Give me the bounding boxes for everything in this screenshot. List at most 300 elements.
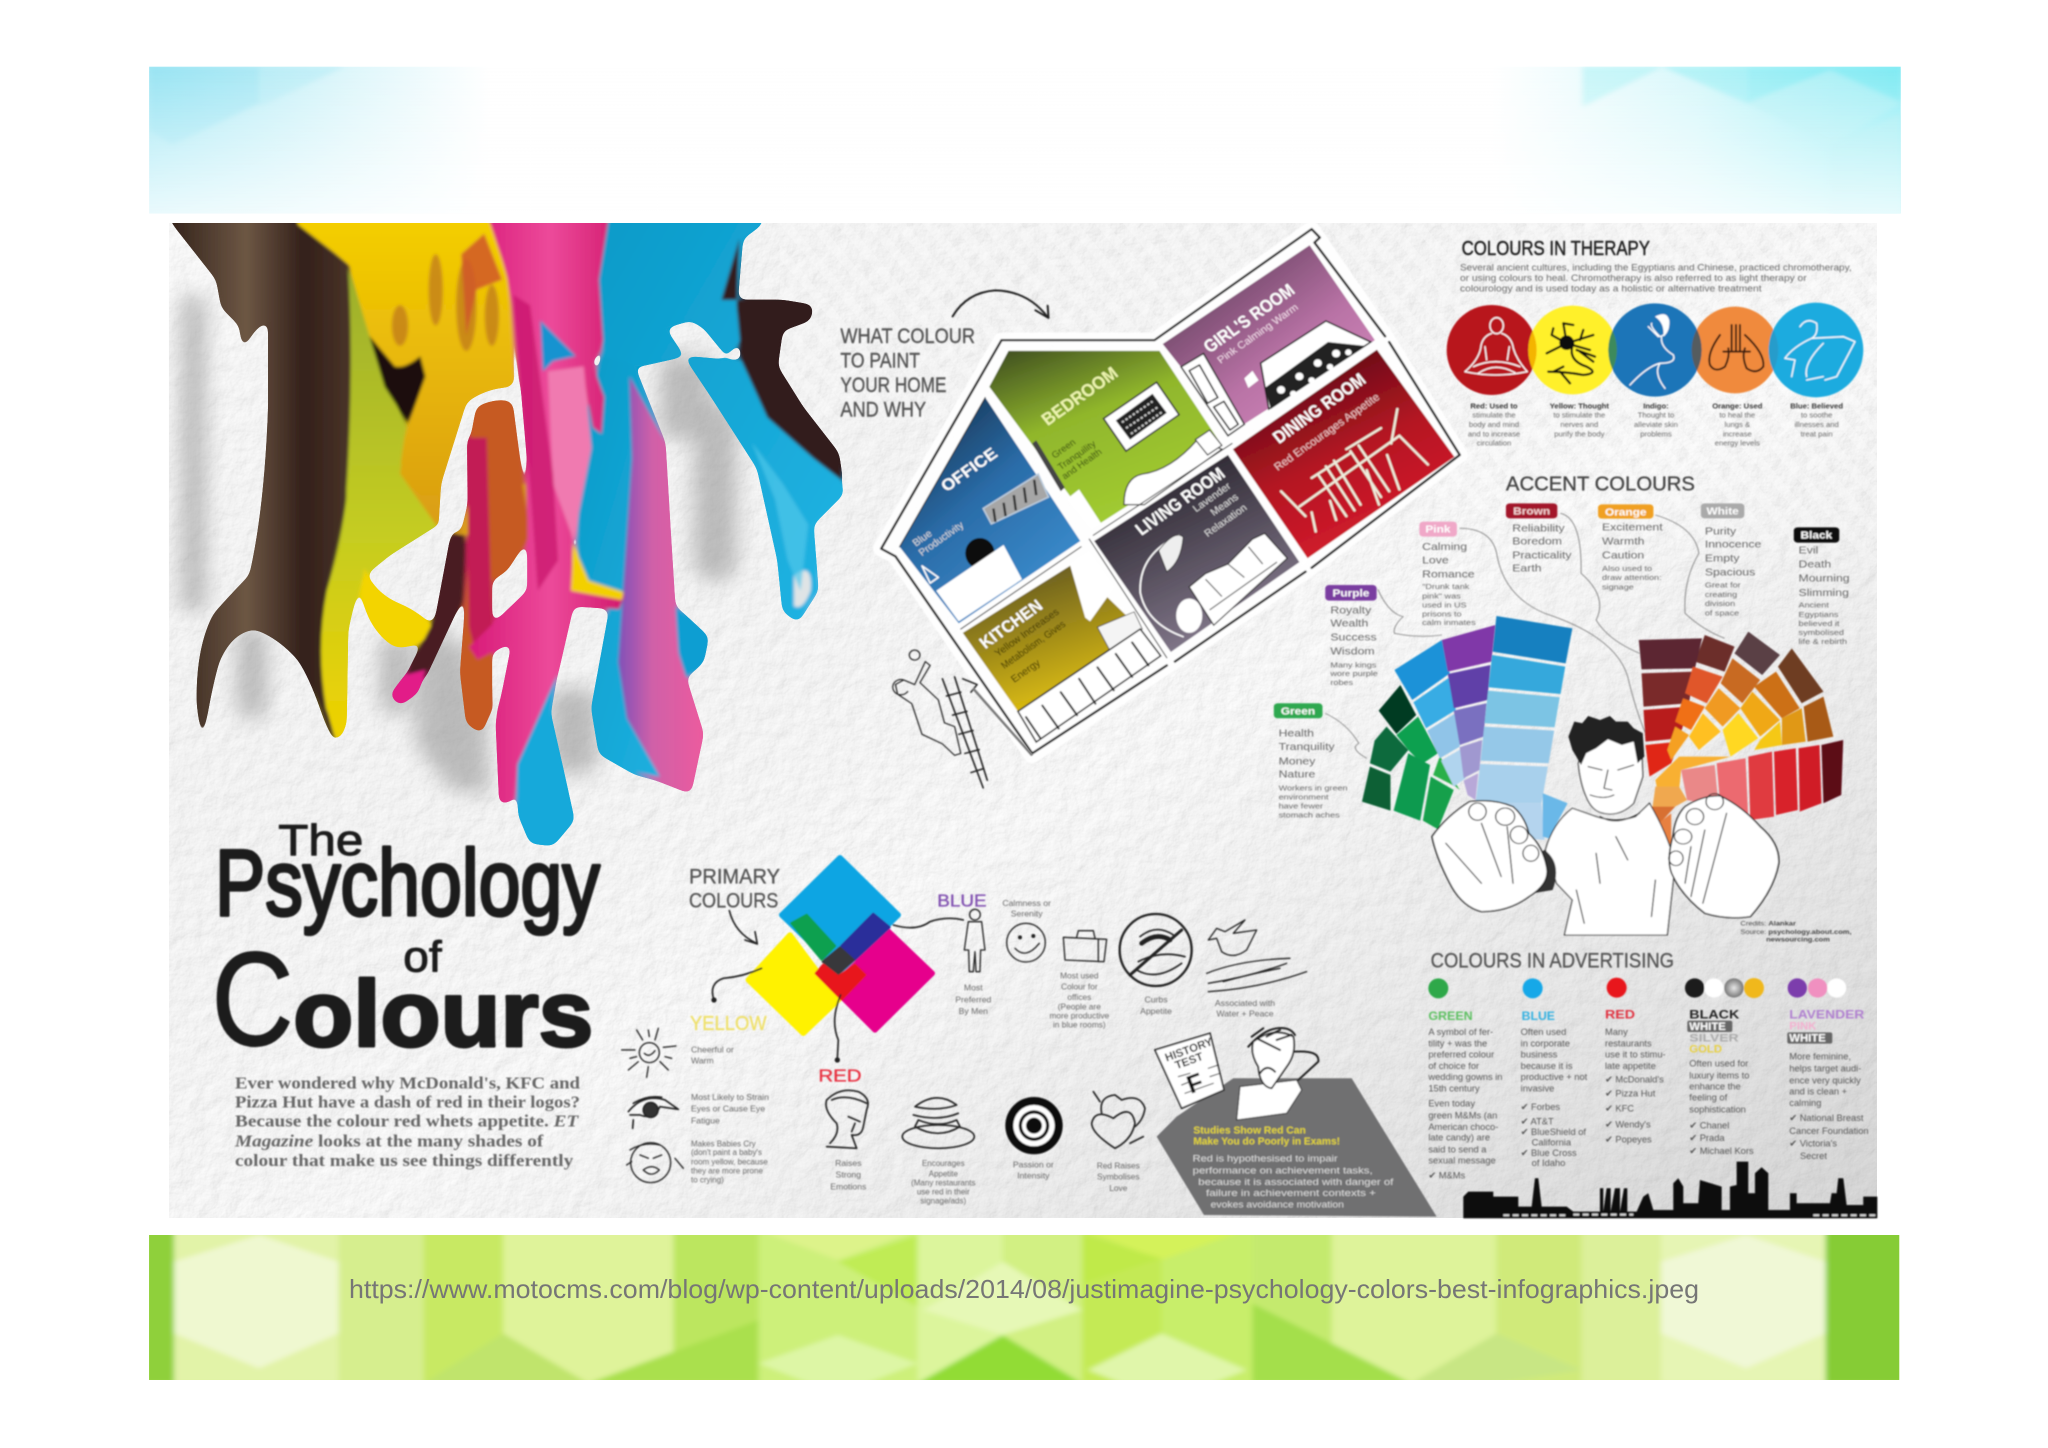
accent lists: Purity bbox=[1705, 526, 1736, 537]
column: lavender pink white: More feminine, bbox=[1789, 1051, 1851, 1061]
heading: what colour to paint your home and why: TO PAINT bbox=[840, 348, 920, 373]
room: living room: Relaxation bbox=[1203, 503, 1250, 540]
heading: COLOURS IN ADVERTISING bbox=[1431, 948, 1674, 972]
accent lists: of space bbox=[1705, 608, 1740, 617]
column: red: ✔ McDonald's bbox=[1605, 1075, 1664, 1085]
callout heading: Studies Show Red Can bbox=[1193, 1125, 1306, 1136]
column: green: Even today bbox=[1428, 1099, 1475, 1109]
column: blue: ✔ AT&T bbox=[1521, 1116, 1554, 1126]
accent lists: Warmth bbox=[1602, 536, 1644, 547]
accent lists: Slimming bbox=[1799, 588, 1849, 599]
column: black white silver gold: SILVER bbox=[1689, 1033, 1739, 1045]
icon: no burger bbox=[1120, 914, 1192, 986]
pink purple streak bbox=[618, 377, 704, 794]
column: blue: ✔ Forbes bbox=[1521, 1102, 1560, 1112]
accent lists: Royalty bbox=[1330, 605, 1372, 616]
panel: colours in therapy: purify the body bbox=[1554, 429, 1605, 438]
accent lists: Also used to bbox=[1602, 564, 1652, 573]
icon: dove and waves bbox=[1207, 920, 1307, 992]
caption: offices: Colour for bbox=[1061, 981, 1098, 991]
column: blue: in corporate bbox=[1521, 1039, 1570, 1049]
cyan central body bbox=[579, 351, 704, 790]
heading: what colour to paint your home and why bbox=[840, 324, 975, 421]
column: green: wedding gowns in bbox=[1427, 1072, 1502, 1082]
label: red: RED bbox=[818, 1066, 862, 1086]
accent lists: robes bbox=[1330, 678, 1353, 687]
accent lists: wore purple bbox=[1329, 669, 1378, 678]
caption: cheerful or warm: Cheerful or bbox=[691, 1045, 734, 1055]
column: green: preferred colour bbox=[1428, 1050, 1494, 1060]
caption: raises strong emotions: Strong bbox=[836, 1169, 861, 1179]
panel: colours in therapy: lungs & bbox=[1725, 420, 1750, 429]
column: lavender pink white: LAVENDER bbox=[1789, 1007, 1865, 1021]
heading: what colour to paint your home and why: WHAT COLOUR bbox=[840, 324, 975, 348]
icon: neuron body bbox=[1559, 335, 1574, 350]
accent lists: Earth bbox=[1512, 563, 1542, 574]
caption: strain eyes: Fatigue bbox=[691, 1115, 720, 1125]
column: green: of choice for bbox=[1428, 1061, 1479, 1071]
accent lists: Wisdom bbox=[1330, 646, 1375, 657]
room: living room: Lavender bbox=[1191, 481, 1234, 515]
column: black white silver gold: ✔ Michael Kors bbox=[1689, 1146, 1754, 1156]
caption: offices: (People are bbox=[1058, 1001, 1101, 1011]
column: red: restaurants bbox=[1605, 1039, 1652, 1049]
right swatch fan bbox=[1639, 632, 1843, 850]
accent lists: signage bbox=[1602, 582, 1634, 591]
bottom banner: green faceted band bbox=[140, 1230, 1916, 1383]
credits: Source: psychology.about.com, bbox=[1740, 929, 1852, 936]
caption: raises strong emotions: Raises bbox=[835, 1158, 862, 1168]
connector dot: red bbox=[835, 1057, 840, 1063]
caption: most preferred by men: By Men bbox=[959, 1006, 988, 1016]
room: kitchen: Yellow Increases bbox=[993, 607, 1062, 659]
arrow: heading to house bbox=[953, 290, 1048, 318]
caption: water and peace: Water + Peace bbox=[1216, 1009, 1274, 1019]
caption: calmness: Calmness or bbox=[1002, 898, 1051, 908]
caption: curbs appetite: Curbs bbox=[1144, 995, 1168, 1005]
panel: blue and red icons and exam callout bbox=[1002, 898, 1437, 1217]
room: office: Blue bbox=[911, 528, 935, 549]
cyan lower drip bbox=[517, 611, 574, 846]
caption: strain eyes: Eyes or Cause Eye bbox=[691, 1104, 765, 1114]
caption: red raises: Love bbox=[1109, 1183, 1128, 1193]
cyan patch in pink bbox=[540, 320, 576, 371]
accent lists: Ancient bbox=[1799, 600, 1830, 609]
panel: colours in therapy: Indigo: bbox=[1643, 401, 1669, 410]
column: lavender pink white: PINK bbox=[1789, 1020, 1817, 1032]
gold folds bbox=[392, 254, 499, 351]
column: black white silver gold: BLACK bbox=[1689, 1007, 1740, 1021]
woman hair bbox=[1655, 315, 1669, 337]
column: blue: BLUE bbox=[1522, 1009, 1555, 1023]
column: black white silver gold: WHITE bbox=[1689, 1021, 1726, 1033]
column: blue: California bbox=[1532, 1138, 1572, 1148]
chip labels: Black bbox=[1800, 530, 1833, 541]
label: blue: BLUE bbox=[937, 891, 987, 911]
callout body: evokes avoidance motivation bbox=[1211, 1199, 1344, 1209]
accent lists: Health bbox=[1279, 728, 1314, 739]
colour dots bbox=[1428, 978, 1846, 998]
column: red: RED bbox=[1605, 1007, 1635, 1021]
title: the psychology of colours: of bbox=[403, 934, 443, 982]
caption: water and peace: Associated with bbox=[1215, 998, 1275, 1008]
column: blue: of Idaho bbox=[1532, 1158, 1565, 1168]
caption: babies cry: (don't paint a baby's bbox=[691, 1148, 762, 1157]
t-shirt bbox=[1545, 803, 1675, 935]
history test paper bbox=[1155, 1033, 1224, 1108]
accent lists: calm inmates bbox=[1422, 618, 1476, 627]
accent lists: Reliability bbox=[1512, 523, 1565, 534]
column: green: late candy) are bbox=[1428, 1133, 1490, 1143]
accent lists: Nature bbox=[1279, 769, 1315, 780]
column: blue: business bbox=[1521, 1050, 1558, 1060]
icon: smiley bbox=[1007, 923, 1045, 962]
icon: sun bbox=[622, 1028, 676, 1077]
captions: circulation bbox=[1477, 439, 1511, 448]
column: green: tility + was the bbox=[1428, 1039, 1487, 1049]
caption: babies cry: room yellow, because bbox=[691, 1157, 768, 1166]
room: kitchen: KITCHEN bbox=[975, 596, 1046, 652]
accent lists: draw attention: bbox=[1602, 573, 1662, 582]
room: bedroom: and Health bbox=[1060, 447, 1104, 482]
accent lists: used in US bbox=[1422, 600, 1467, 609]
intro paragraph bbox=[234, 1073, 580, 1170]
column: blue: because it is bbox=[1521, 1061, 1573, 1071]
overlapping colour diamonds bbox=[748, 858, 932, 1033]
column: green: 15th century bbox=[1428, 1084, 1480, 1094]
source url caption: https://www.motocms.com/blog/wp-content/uploads/2014/08/justimagine-psychology-colors-best-infographics.jpeg bbox=[349, 1274, 1699, 1304]
caption: red raises: Red Raises bbox=[1097, 1160, 1140, 1170]
accent lists: Love bbox=[1422, 555, 1449, 566]
column: black white silver gold bbox=[1687, 1007, 1754, 1156]
panel: primary colours bbox=[622, 858, 992, 1205]
panel: colours in therapy: Yellow: Thought bbox=[1550, 401, 1609, 410]
title: the psychology of colours: Psychology bbox=[215, 831, 600, 935]
caption: raises strong emotions: Emotions bbox=[830, 1181, 867, 1191]
accent lists: Egyptians bbox=[1799, 610, 1838, 619]
icon: painter on ladder bbox=[893, 650, 1032, 788]
arrow: heading to diamond bbox=[729, 911, 757, 944]
connector lines bbox=[1325, 513, 1725, 758]
icon: neuron bbox=[1547, 323, 1595, 383]
face bbox=[1588, 765, 1640, 821]
column: green bbox=[1427, 1009, 1502, 1180]
column: blue: productive + not bbox=[1521, 1072, 1588, 1082]
accent lists: Spacious bbox=[1705, 567, 1756, 578]
column: blue: ✔ Blue Cross bbox=[1521, 1148, 1577, 1158]
room: office bbox=[900, 398, 1080, 623]
panel: colours in therapy: alleviate skin bbox=[1634, 420, 1678, 429]
room: office: Productivity bbox=[917, 520, 967, 559]
icon: target bbox=[1005, 1097, 1063, 1154]
title: the psychology of colours: The bbox=[278, 817, 363, 865]
intro paragraph: colour that make us see things differently bbox=[235, 1151, 574, 1170]
skyline bbox=[1463, 1162, 1877, 1218]
left swatch fan bbox=[1362, 616, 1572, 840]
caption: curbs appetite: Appetite bbox=[1140, 1006, 1172, 1016]
caption: most preferred by men: Most bbox=[964, 983, 983, 993]
accent lists: pink" was bbox=[1422, 591, 1461, 600]
column: red: ✔ KFC bbox=[1605, 1104, 1634, 1114]
column: lavender pink white: ✔ National Breast bbox=[1789, 1113, 1864, 1123]
panel: colours in therapy: nerves and bbox=[1560, 420, 1598, 429]
accent lists: Excitement bbox=[1602, 522, 1664, 533]
room: kitchen: Energy bbox=[1009, 657, 1044, 685]
intro text: colourology and is used today as a holistic or alternative treatment bbox=[1460, 283, 1762, 293]
accent lists: have fewer bbox=[1279, 801, 1323, 810]
paint drips illustration bbox=[160, 198, 844, 846]
room divider lines bbox=[900, 398, 1232, 658]
therapy circles bbox=[1447, 303, 1863, 397]
caption: encourages appetite: use red in their bbox=[917, 1187, 970, 1196]
caption: offices: more productive bbox=[1049, 1010, 1110, 1020]
accent lists: creating bbox=[1705, 590, 1738, 599]
room: dining room bbox=[1233, 350, 1454, 558]
left hand bbox=[1432, 801, 1547, 912]
accent lists bbox=[1279, 522, 1850, 819]
callout body: because it is associated with danger of bbox=[1198, 1177, 1394, 1187]
column: blue: Often used bbox=[1521, 1027, 1566, 1037]
room: bedroom: BEDROOM bbox=[1038, 363, 1122, 429]
column: green: sexual message bbox=[1428, 1155, 1496, 1165]
accent lists: Romance bbox=[1422, 569, 1475, 580]
room: kitchen: Metabolism, Gives bbox=[999, 619, 1068, 672]
column: black white silver gold: ✔ Prada bbox=[1689, 1133, 1725, 1143]
icon: meditating figure bbox=[1465, 318, 1527, 375]
panel: primary colours: COLOURS bbox=[689, 889, 778, 913]
room: living room bbox=[1094, 455, 1299, 652]
dark brown right paint bbox=[721, 239, 843, 481]
cyan upper paint bbox=[599, 198, 844, 622]
connector: yellow bbox=[712, 968, 762, 1000]
chip labels bbox=[1274, 503, 1839, 718]
accent lists: Calming bbox=[1422, 542, 1467, 553]
caption: babies cry: Makes Babies Cry bbox=[691, 1140, 756, 1149]
room: bedroom: Tranquility bbox=[1056, 439, 1099, 473]
icon: eye bbox=[628, 1097, 678, 1128]
column: black white silver gold: Often used for bbox=[1689, 1059, 1748, 1069]
room: living room: LIVING ROOM bbox=[1132, 464, 1229, 539]
icon: hearts bbox=[1092, 1092, 1145, 1148]
connector dot: yellow bbox=[711, 997, 717, 1003]
panel: colours in therapy: to stimulate the bbox=[1553, 411, 1605, 420]
panel: colours in therapy: Blue: Believed bbox=[1790, 401, 1843, 410]
column: red: ✔ Pizza Hut bbox=[1605, 1089, 1656, 1099]
chip labels: Orange bbox=[1605, 507, 1647, 518]
chip labels: Green bbox=[1281, 706, 1315, 717]
column: red: ✔ Popeyes bbox=[1605, 1134, 1652, 1144]
column: lavender pink white: WHITE bbox=[1789, 1033, 1826, 1045]
house outline bbox=[881, 229, 1460, 753]
panel: colours in therapy: illnesses and bbox=[1794, 420, 1839, 429]
accent lists: Boredom bbox=[1512, 536, 1562, 547]
chip labels: Brown bbox=[1513, 506, 1550, 517]
column: black white silver gold: luxury items to bbox=[1689, 1070, 1749, 1080]
heading: ACCENT COLOURS bbox=[1506, 472, 1695, 495]
caption: encourages appetite: signage/ads) bbox=[920, 1196, 966, 1205]
column: black white silver gold: feeling of bbox=[1689, 1093, 1728, 1103]
captions: body and mind bbox=[1469, 420, 1519, 429]
accent lists: believed it bbox=[1799, 619, 1840, 628]
accent lists: Mourning bbox=[1799, 573, 1850, 584]
column: lavender pink white bbox=[1787, 1007, 1869, 1161]
accent lists: Caution bbox=[1602, 550, 1644, 561]
column: red: late appetite bbox=[1605, 1061, 1656, 1071]
panel: colours in therapy: increase bbox=[1723, 429, 1752, 438]
brown paint body bbox=[172, 223, 358, 738]
icon: man bbox=[964, 909, 985, 972]
column: lavender pink white: calming bbox=[1789, 1098, 1821, 1108]
panel: colours in advertising bbox=[1427, 948, 1877, 1218]
accent lists: Innocence bbox=[1705, 539, 1761, 550]
icon: crying baby bbox=[627, 1143, 683, 1183]
panel: infographic paper background bbox=[169, 223, 1877, 1218]
head bbox=[1578, 733, 1643, 814]
history test paper: F bbox=[1183, 1068, 1207, 1100]
column: green: green M&Ms (an bbox=[1428, 1110, 1497, 1120]
chip labels: Purple bbox=[1332, 588, 1369, 599]
heading: PRIMARY bbox=[689, 864, 780, 888]
accent lists: Tranquility bbox=[1279, 742, 1335, 753]
heading: what colour to paint your home and why: AND WHY bbox=[840, 397, 926, 421]
history test paper: HISTORY bbox=[1164, 1036, 1215, 1064]
column: black white silver gold: ✔ Chanel bbox=[1689, 1120, 1729, 1130]
caption: passion: Intensity bbox=[1017, 1170, 1050, 1180]
callout heading: Make You do Poorly in Exams! bbox=[1193, 1136, 1340, 1147]
panel: accent colours bbox=[1274, 472, 1852, 943]
accent lists: Great for bbox=[1705, 580, 1741, 589]
accent lists: Empty bbox=[1705, 553, 1740, 564]
panel: colours in therapy: to soothe bbox=[1801, 411, 1832, 420]
room: bedroom bbox=[989, 351, 1222, 530]
caption: encourages appetite: Appetite bbox=[929, 1170, 959, 1179]
caption: encourages appetite: Encourages bbox=[922, 1159, 965, 1168]
top banner: cyan faceted band bbox=[149, 67, 1901, 213]
accent lists: Money bbox=[1279, 756, 1316, 767]
panel: colours in therapy: Orange: Used bbox=[1712, 401, 1763, 410]
column: green: American choco- bbox=[1428, 1122, 1498, 1132]
panel: colours in therapy: energy levels bbox=[1715, 439, 1760, 448]
accent lists: life & rebirth bbox=[1799, 637, 1847, 646]
fingers and nails bbox=[1446, 794, 1727, 923]
column: black white silver gold: sophistication bbox=[1689, 1105, 1746, 1115]
caption: strain eyes: Most Likely to Strain bbox=[691, 1092, 769, 1102]
hair bbox=[1568, 716, 1644, 765]
captions: stimulate the bbox=[1472, 411, 1516, 420]
column: lavender pink white: and is clean + bbox=[1789, 1086, 1847, 1096]
intro paragraph: Pizza Hut have a dash of red in their logos? bbox=[235, 1093, 580, 1112]
column: lavender pink white: ence very quickly bbox=[1789, 1075, 1861, 1085]
orange-red folds bbox=[461, 234, 502, 336]
column: green: A symbol of fer- bbox=[1428, 1027, 1493, 1037]
caption: most preferred by men: Preferred bbox=[955, 995, 992, 1005]
accent lists: "Drunk tank bbox=[1422, 582, 1470, 591]
column: black white silver gold: enhance the bbox=[1689, 1081, 1741, 1091]
accent lists: stomach aches bbox=[1279, 810, 1340, 819]
magenta main fold bbox=[469, 198, 632, 805]
icon: angry head bbox=[826, 1090, 868, 1148]
callout body: Red is hypothesised to impair bbox=[1193, 1154, 1338, 1164]
column: lavender pink white: ✔ Victoria's bbox=[1789, 1139, 1837, 1149]
room: girl's room: GIRL'S ROOM bbox=[1200, 280, 1298, 357]
panel: colours in therapy: to heal the bbox=[1719, 411, 1755, 420]
captions: and to increase bbox=[1468, 429, 1520, 438]
caption: calmness: Serenity bbox=[1011, 909, 1043, 919]
wristband bbox=[1533, 850, 1556, 893]
accent lists: Success bbox=[1330, 632, 1377, 643]
accent lists: Workers in green bbox=[1279, 783, 1348, 792]
icon: burger on plate bbox=[902, 1098, 974, 1148]
icon: briefcase bbox=[1063, 931, 1107, 962]
accent lists: symbolised bbox=[1799, 628, 1844, 637]
column: red: Many bbox=[1605, 1027, 1628, 1037]
yellow-green paint bbox=[321, 267, 438, 743]
room: girl's room bbox=[1163, 245, 1375, 436]
accent lists: environment bbox=[1279, 792, 1329, 801]
title: the psychology of colours bbox=[212, 817, 600, 1074]
panel: colours in therapy: problems bbox=[1640, 429, 1672, 438]
title: the psychology of colours: C bbox=[212, 925, 293, 1074]
panel: colours in therapy: Thought to bbox=[1638, 411, 1674, 420]
column: red bbox=[1605, 1007, 1666, 1144]
caption: offices: offices bbox=[1067, 992, 1091, 1002]
icon: torso back bbox=[1785, 321, 1855, 380]
heading: COLOURS IN THERAPY bbox=[1462, 237, 1650, 260]
yellow paint blob bbox=[362, 568, 433, 647]
icon: seated woman bbox=[1630, 315, 1674, 388]
column: red: use it to stimu- bbox=[1605, 1050, 1666, 1060]
dark crevice bbox=[369, 336, 426, 422]
caption: cheerful or warm: Warm bbox=[691, 1055, 714, 1065]
room: office: OFFICE bbox=[937, 444, 1001, 496]
panel: colours in therapy bbox=[1447, 237, 1863, 448]
intro paragraph: Because the colour red whets appetite. ET bbox=[235, 1112, 580, 1131]
caption: babies cry: they are more prone bbox=[691, 1166, 763, 1175]
column: blue: ✔ BlueShield of bbox=[1521, 1127, 1586, 1137]
accent lists: Practicality bbox=[1512, 550, 1572, 561]
column: green: said to send a bbox=[1428, 1144, 1487, 1154]
heading: what colour to paint your home and why: YOUR HOME bbox=[840, 373, 946, 397]
credits: newsourcing.com bbox=[1766, 937, 1830, 943]
caption: passion: Passion or bbox=[1013, 1159, 1054, 1169]
accent lists: Many kings bbox=[1330, 660, 1376, 669]
callout: exam shape bbox=[1157, 1078, 1437, 1217]
intro paragraph: Magazine looks at the many shades of bbox=[234, 1132, 544, 1151]
panel: house cross-section bbox=[881, 229, 1460, 755]
column: red: ✔ Wendy's bbox=[1605, 1119, 1651, 1129]
column: blue bbox=[1521, 1009, 1588, 1168]
room: kitchen bbox=[963, 551, 1161, 742]
man holding swatches bbox=[1432, 716, 1779, 935]
right hand bbox=[1669, 796, 1779, 918]
caption: red raises: Symbolises bbox=[1097, 1171, 1140, 1181]
yellow fleck on pink bbox=[571, 545, 623, 600]
brown and crimson strands bbox=[405, 535, 464, 678]
panel: colours in therapy: treat pain bbox=[1801, 429, 1833, 438]
title: the psychology of colours: olours bbox=[293, 962, 593, 1066]
caption: offices: Most used bbox=[1060, 970, 1099, 980]
intro paragraph: Ever wondered why McDonald's, KFC and bbox=[235, 1073, 580, 1092]
captions: Red: Used to bbox=[1470, 401, 1518, 410]
accent lists: Wealth bbox=[1330, 618, 1368, 629]
column: green: GREEN bbox=[1428, 1009, 1473, 1023]
room: dining room: Red Encourages Appetite bbox=[1272, 391, 1382, 473]
column: green: ✔ M&Ms bbox=[1428, 1170, 1466, 1180]
house outer white shape bbox=[881, 229, 1460, 755]
caption: encourages appetite: (Many restaurants bbox=[911, 1179, 975, 1188]
callout body: failure in achievement contexts + bbox=[1206, 1188, 1376, 1198]
room: girl's room: Pink Calming Warm bbox=[1216, 302, 1301, 366]
